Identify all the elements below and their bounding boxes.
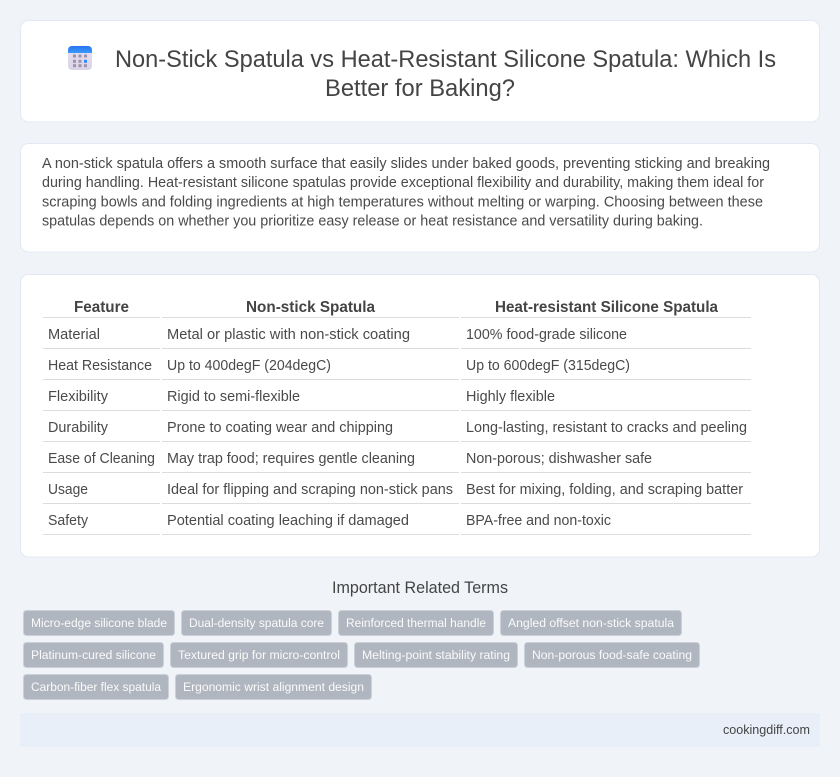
table row: usage: Ideal for flipping and scraping non-stick pans [167,482,453,498]
table header row: Heat-resistant Silicone Spatula [495,299,718,316]
panel: header [20,20,820,122]
table row: durability [43,420,751,442]
table header row: Feature [74,299,129,316]
text block: introduction paragraph: scraping bowls and folding ingredients at high temperatures without melting or warping. Choosing between these [42,194,763,210]
tag [524,642,700,668]
table row: material: Metal or plastic with non-stick coating [167,327,410,343]
table row: durability: Prone to coating wear and chipping [167,420,393,436]
table row: material: 100% food-grade silicone [466,327,627,343]
table row: durability: Long-lasting, resistant to cracks and peeling [466,420,747,436]
tag [170,642,348,668]
table row: material: Material [48,327,100,343]
tag [338,610,494,636]
table header row [43,299,751,318]
table row: usage: Usage [48,482,88,498]
table row: usage: Best for mixing, folding, and scraping batter [466,482,743,498]
table row: ease of cleaning: Ease of Cleaning [48,451,155,467]
table row: ease of cleaning: May trap food; requires gentle cleaning [167,451,415,467]
tag: Ergonomic wrist alignment design [183,680,364,694]
table row: heat resistance: Up to 600degF (315degC) [466,358,630,374]
tag [24,642,164,668]
tag: Carbon-fiber flex spatula [31,680,161,694]
tag: Textured grip for micro-control [178,648,340,662]
table row: usage [43,482,751,504]
table row: safety: Potential coating leaching if damaged [167,513,409,529]
panel: introduction [20,144,820,252]
title [115,46,776,102]
tag: Platinum-cured silicone [31,648,156,662]
icon: calendar [68,46,92,70]
tag: Dual-density spatula core [189,616,324,630]
table row: heat resistance [43,358,751,380]
title: Non-Stick Spatula vs Heat-Resistant Silicone Spatula: Which Is [115,46,776,73]
table header row: Non-stick Spatula [246,299,375,316]
heading: important related terms: Important Related Terms [332,579,508,597]
table row: flexibility: Flexibility [48,389,109,405]
table row: heat resistance: Heat Resistance [48,358,152,374]
panel: related term tags [24,610,700,700]
table row: material [43,327,751,349]
table row: heat resistance: Up to 400degF (204degC) [167,358,331,374]
table row: flexibility [43,389,751,411]
table row: safety: BPA-free and non-toxic [466,513,611,529]
tag: Non-porous food-safe coating [532,648,692,662]
tag [354,642,518,668]
text block: introduction paragraph: A non-stick spatula offers a smooth surface that easily slides under baked goods, preventing sticking and breaking [42,156,770,172]
footer [20,713,820,747]
tag [182,610,332,636]
tag: Melting-point stability rating [362,648,510,662]
tag: Angled offset non-stick spatula [508,616,674,630]
tag: Reinforced thermal handle [346,616,486,630]
title: Better for Baking? [325,75,515,102]
table row: flexibility: Rigid to semi-flexible [167,389,300,405]
footer: cookingdiff.com [723,722,810,737]
table row: flexibility: Highly flexible [466,389,555,405]
table row: durability: Durability [48,420,109,436]
table row: safety [43,513,751,535]
panel: comparison table [20,274,820,557]
text block: introduction paragraph: spatulas depends on whether you prioritize easy release or heat resistance and versatility during baking. [42,214,703,230]
tag [500,610,682,636]
tag: Micro-edge silicone blade [31,616,167,630]
text block: introduction paragraph: during handling. Heat-resistant silicone spatulas provide exceptional flexibility and durability, making them ideal for [42,175,764,191]
table row: safety: Safety [48,513,89,529]
text block: introduction paragraph [42,156,770,230]
tag [24,674,168,700]
table row: ease of cleaning [43,451,751,473]
tag [176,674,372,700]
tag [24,610,174,636]
table row: ease of cleaning: Non-porous; dishwasher safe [466,451,652,467]
